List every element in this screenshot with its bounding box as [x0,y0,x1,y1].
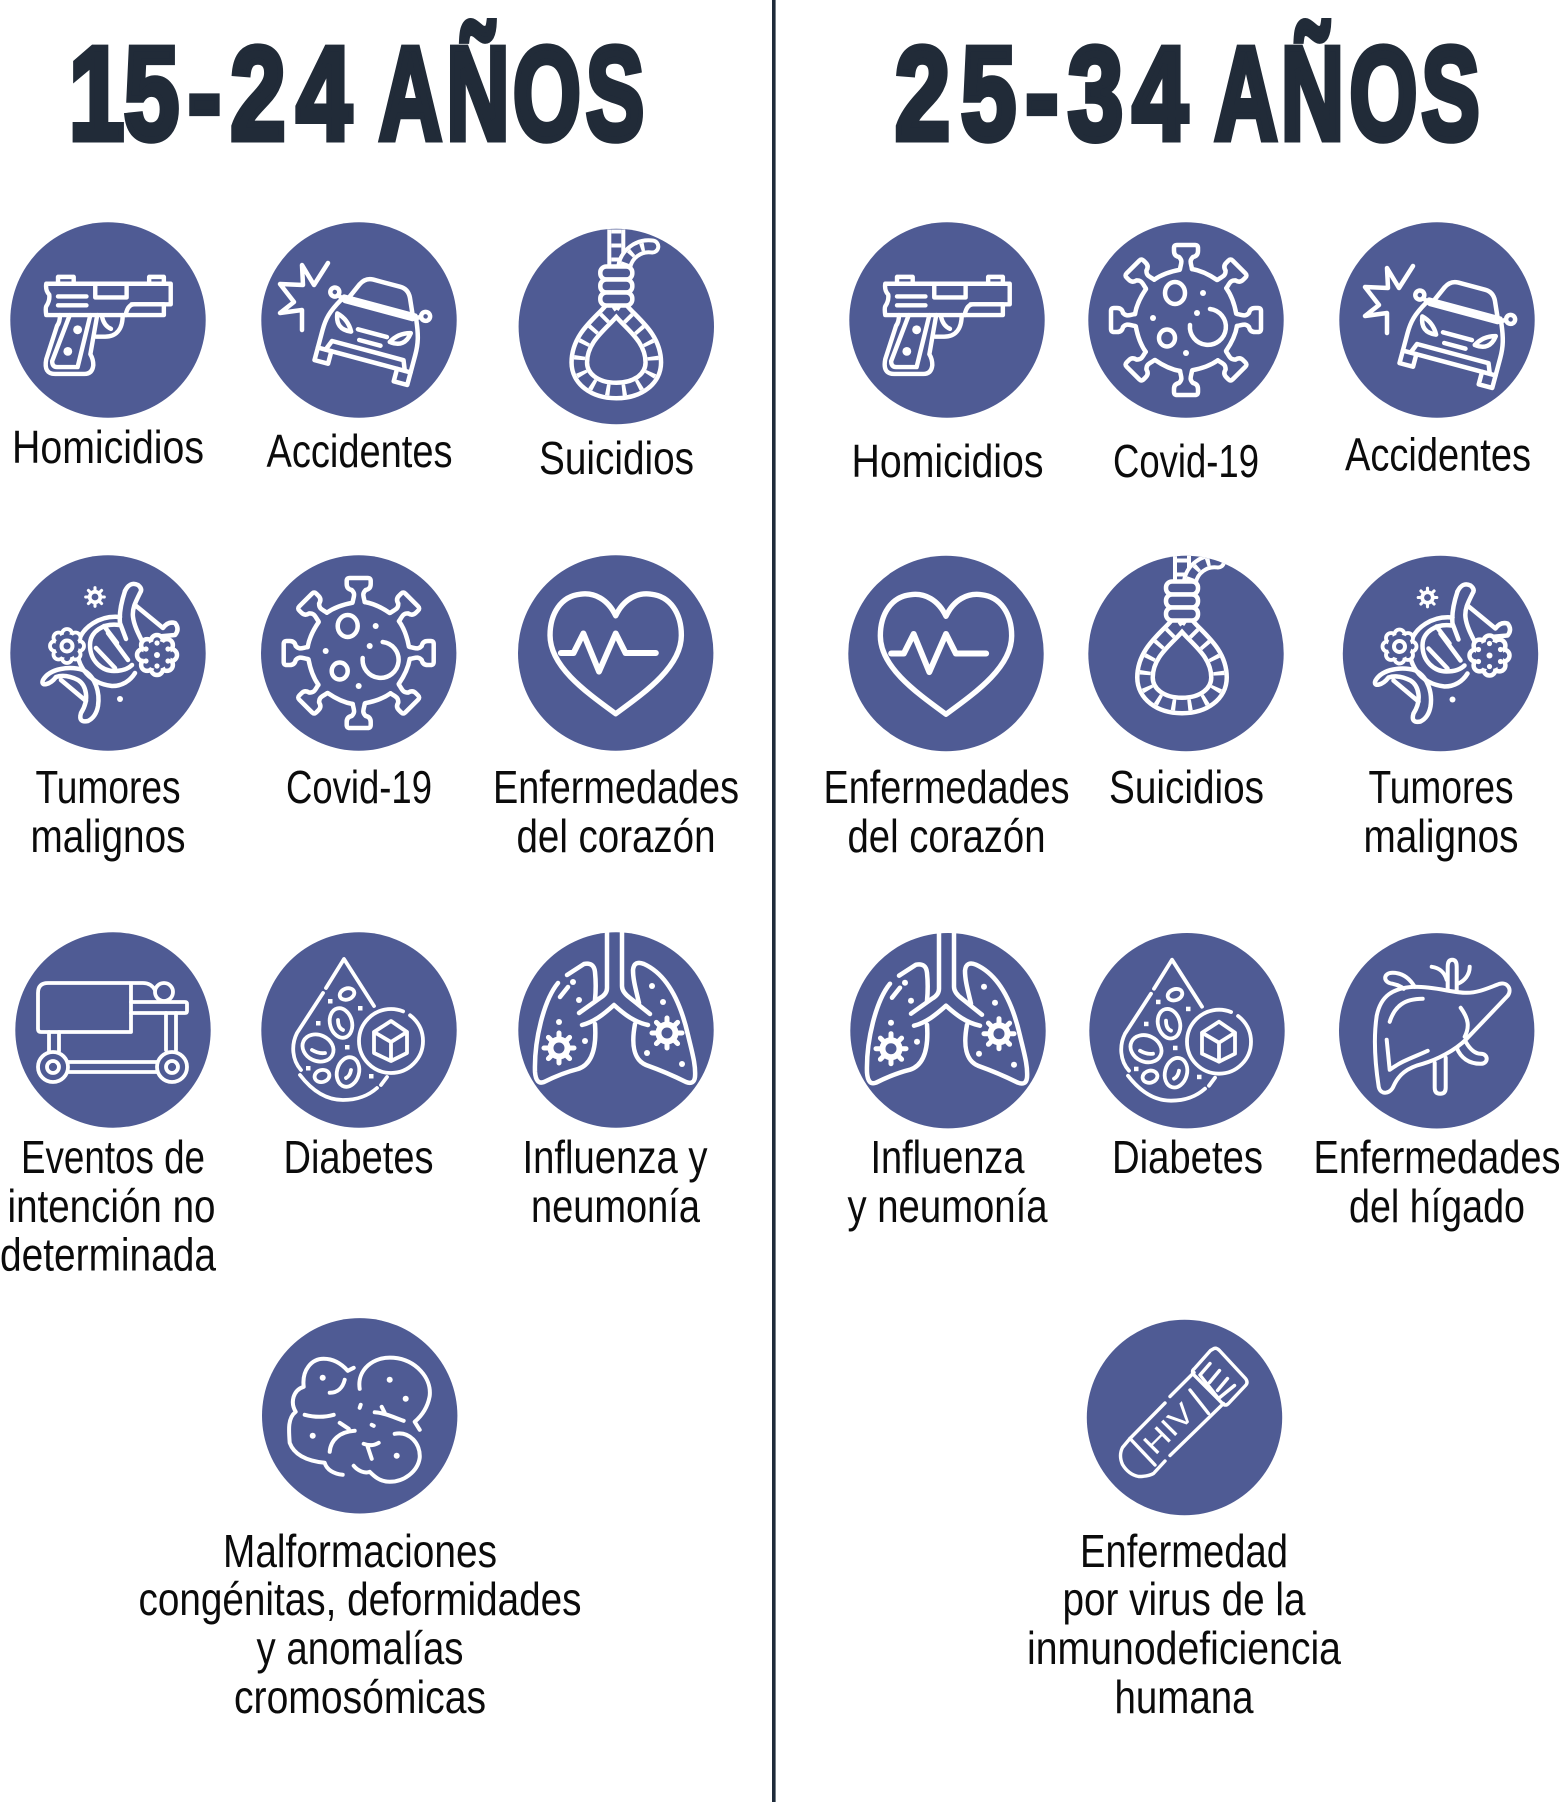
heading: 25-34 años: AÑOS [1215,20,1480,167]
heading: 15-24 años: AÑOS [379,20,644,167]
label: Malformaciones congénitas: y anomalías [256,1622,464,1674]
label: Enfermedades del hígado [1314,1131,1559,1232]
heading: 25-34 años [895,19,1480,167]
heading: 25-34 años: 25-34 [895,19,1188,167]
label: Covid-19: Covid-19 [286,761,432,813]
label: Diabetes: Diabetes [1112,1131,1263,1183]
icon: malformed cells [262,1318,457,1514]
label: Eventos de intención no determinada: determinada [0,1228,216,1280]
item: Enfermedades del hígado [1314,933,1559,1232]
label: Enfermedad por virus de la inmunodeficiencia humana: por virus de la [1062,1573,1306,1625]
icon: car crash [1339,222,1535,418]
label: Tumores malignos [1364,761,1518,862]
label: Malformaciones congénitas: Malformaciones [223,1525,497,1577]
item: Malformaciones [138,1318,582,1723]
label: Influenza y neumonía: Influenza [870,1131,1025,1183]
icon: dna and tumor cells [1343,556,1538,751]
item: Tumores malignos [10,555,206,862]
icon: blood drop and sugar cube [261,932,457,1128]
label: Enfermedades del corazón [493,761,739,862]
label: Tumores malignos: malignos [1364,810,1518,862]
label: Influenza y neumonía: y neumonía [848,1180,1048,1232]
icon: liver [1339,933,1534,1128]
label: Enfermedad por virus de la inmunodeficiencia humana: Enfermedad [1080,1525,1288,1577]
icon: lungs [850,933,1046,1128]
icon: coronavirus [1088,222,1284,418]
item: Enfermedades del corazón [493,555,739,862]
item: Eventos de intención no determinada [0,932,216,1280]
item: Enfermedad por VIH [1027,1320,1341,1723]
label: Enfermedades del corazón: del corazón [848,810,1046,862]
label: Tumores malignos: malignos [30,810,186,862]
icon: coronavirus [261,555,456,751]
item: Accidentes [1339,222,1535,481]
icon: gun [10,222,206,418]
label: Covid-19: Covid-19 [1113,435,1259,487]
icon: car crash [261,222,457,418]
item: Homicidios [10,222,206,473]
label: Enfermedades del hígado: del hígado [1349,1180,1525,1232]
icon: blood drop and sugar cube [1089,933,1285,1128]
icon: noose [519,229,714,424]
item: Homicidios [849,222,1045,487]
item: Covid-19 [1088,222,1284,487]
label: Tumores malignos: Tumores [1368,761,1514,813]
label: Enfermedad por virus de la inmunodeficiencia humana: humana [1114,1671,1254,1723]
label: Diabetes: Diabetes [284,1131,434,1183]
item: Enfermedades del corazón [824,556,1070,862]
label: Tumores malignos [30,761,186,862]
label: Enfermedades del corazón [824,761,1070,862]
panel: 15-24 años [0,19,739,1723]
label: Influenza y neumonía: neumonía [531,1180,700,1232]
item: Diabetes [261,932,457,1183]
icon: lungs [518,932,714,1128]
icon: heart with pulse [518,555,713,751]
label: Homicidios: Homicidios [852,435,1044,487]
icon: HIV test tube [1087,1320,1282,1515]
icon: noose [1088,544,1284,751]
label: Eventos de intención no determinada: Eventos de [21,1131,205,1183]
label: Homicidios: Homicidios [12,421,204,473]
label: Suicidios: Suicidios [539,432,694,484]
item: Accidentes [261,222,457,477]
item: Diabetes [1089,933,1285,1183]
icon: gun [849,222,1045,418]
label: Enfermedades del corazón: del corazón [516,810,716,862]
icon: heart with pulse [848,556,1044,751]
label: Tumores malignos: Tumores [36,761,180,813]
label: Malformaciones congénitas: congénitas, deformidades [138,1573,582,1625]
item: Suicidios [519,229,714,484]
label: Enfermedad por virus de la inmunodeficiencia humana: inmunodeficiencia [1027,1622,1341,1674]
divider between age groups [772,0,776,1802]
heading: 15-24 años: 15-24 [69,19,352,167]
label: Enfermedades del corazón: Enfermedades [493,761,739,813]
label: Enfermedad por virus de la inmunodeficiencia humana [1027,1525,1341,1723]
item: Covid-19 [261,555,456,813]
label: Eventos de intención no determinada: intención no [8,1180,216,1232]
label: Influenza y neumonía [522,1131,708,1232]
item: Influenza y neumonía [518,932,714,1232]
item: Tumores malignos [1343,556,1538,862]
item: Suicidios [1088,544,1284,813]
label: Accidentes: Accidentes [266,425,452,477]
label: Malformaciones congénitas [138,1525,582,1723]
panel: 25-34 años [824,19,1559,1723]
icon: hospital gurney [15,932,211,1128]
label: Malformaciones congénitas: cromosómicas [234,1671,486,1723]
label: Influenza y neumonía: Influenza y [522,1131,708,1183]
icon: dna and tumor cells [10,555,206,751]
label: Eventos de intención no determinada [0,1131,216,1280]
heading: 15-24 años [69,19,644,167]
label: Enfermedades del corazón: Enfermedades [824,761,1070,813]
label: Suicidios: Suicidios [1109,761,1264,813]
item: Influenza y neumonía [848,933,1048,1232]
label: Influenza y neumonía [848,1131,1048,1232]
